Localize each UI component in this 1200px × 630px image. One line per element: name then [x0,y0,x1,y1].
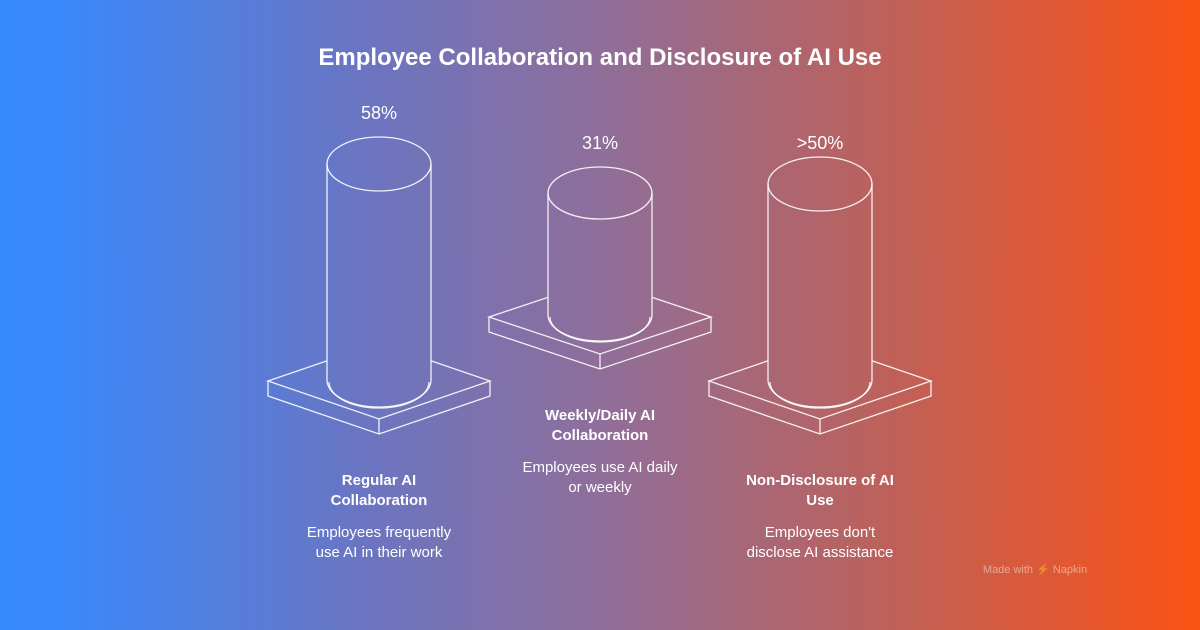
label 2: Employees use AI daily [522,459,678,476]
cylinder 1 [268,137,490,434]
value: >50%: >50% [797,133,843,153]
label 2: or weekly [568,479,632,496]
label 3: Employees don't [765,524,875,541]
value: 58%: 58% [361,103,397,123]
label 3: Use [806,492,834,509]
watermark: Made with ⚡ Napkin [983,564,1087,576]
label 1 [307,472,452,561]
label 3 [746,472,894,561]
label 3: Non-Disclosure of AI [746,472,894,489]
label 1: Collaboration [331,492,427,509]
cylinder 3 [709,157,931,434]
label 1: use AI in their work [316,544,442,561]
label 2: Weekly/Daily AI [545,407,655,424]
cylinder 2 [489,167,711,369]
title: Employee Collaboration and Disclosure of AI Use [318,44,882,71]
label 2 [522,407,678,496]
label 1: Regular AI [342,472,416,489]
label 1: Employees frequently [307,524,451,541]
value: 31%: 31% [582,133,618,153]
label 2: Collaboration [552,427,648,444]
label 3: disclose AI assistance [747,544,893,561]
